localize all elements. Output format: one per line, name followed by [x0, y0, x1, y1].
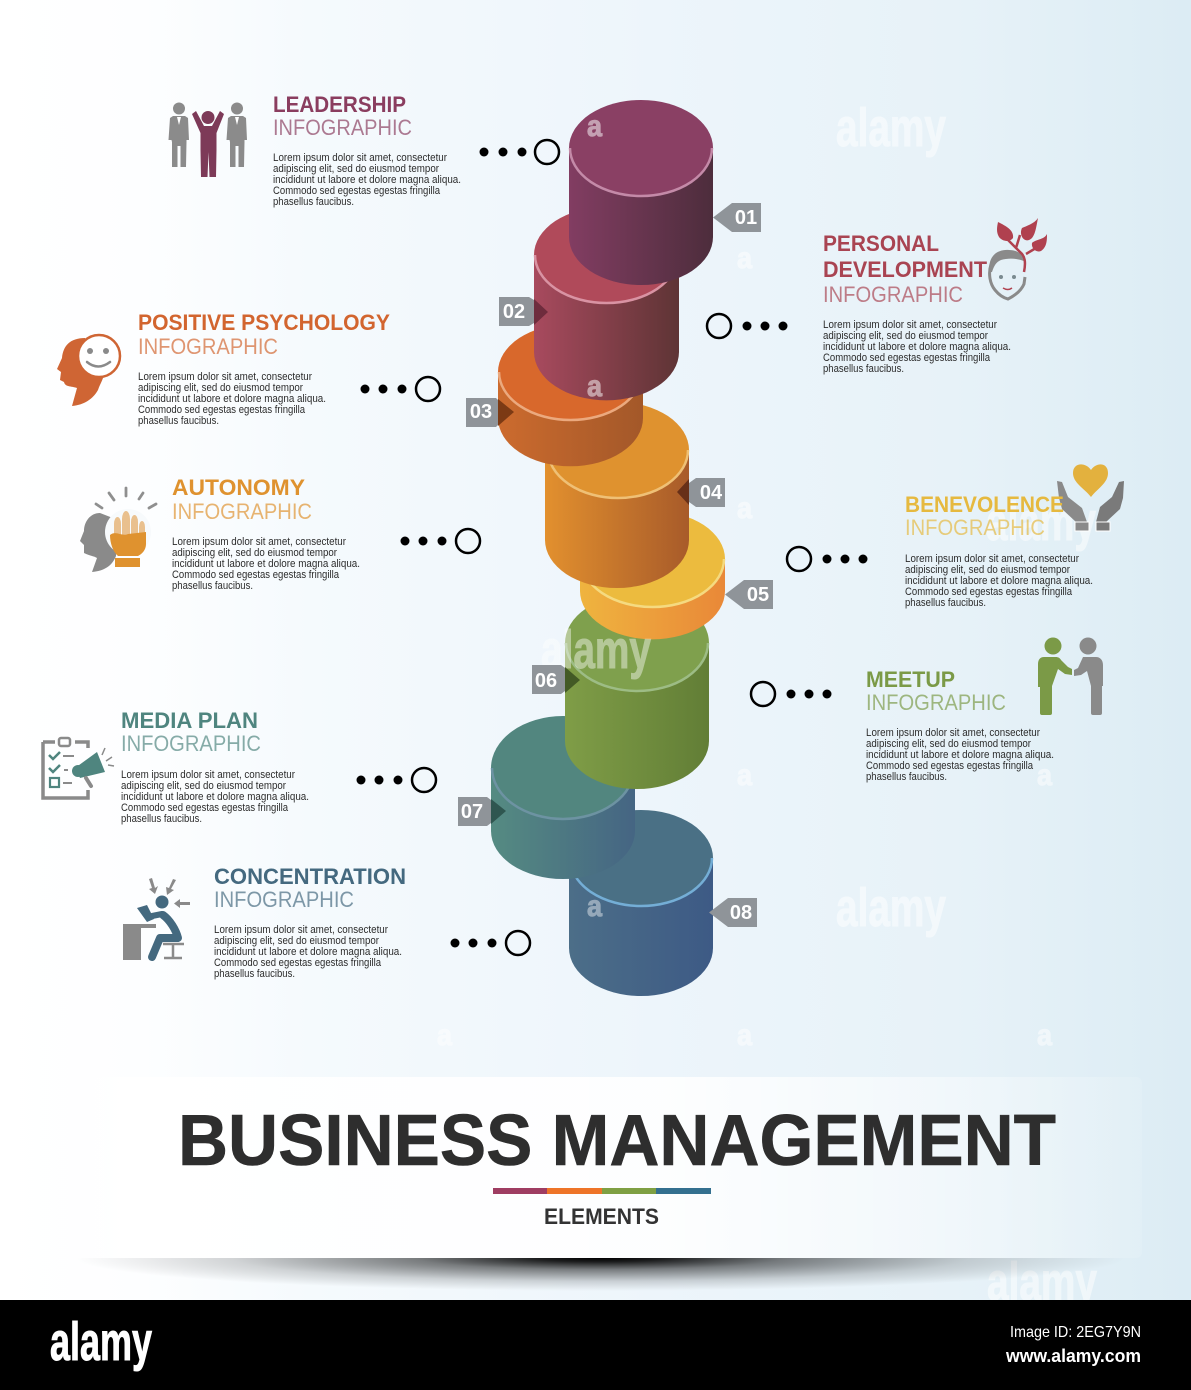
watermark: background: alamy: [836, 98, 946, 158]
subheading: INFOGRAPHIC: [866, 690, 1006, 715]
number tag 05: [725, 580, 773, 609]
icon: face with growing plant: [989, 218, 1047, 299]
icon: two people shaking hands: [1038, 638, 1103, 715]
body text: Commodo sed egestas egestas fringilla: [172, 569, 339, 581]
number tag 06: [532, 665, 580, 694]
watermark: background: a: [737, 242, 752, 275]
body text: phasellus faucibus.: [866, 771, 947, 783]
body text: adipiscing elit, sed do eiusmod tempor: [138, 382, 303, 394]
panel: personal development: [823, 218, 1047, 375]
heading: POSITIVE PSYCHOLOGY: [138, 310, 390, 335]
icon: checklist and megaphone: [43, 738, 114, 798]
body text: phasellus faucibus.: [214, 968, 295, 980]
number tag 07: [458, 797, 506, 826]
body text: phasellus faucibus.: [905, 597, 986, 609]
subheading: INFOGRAPHIC: [138, 334, 278, 359]
subheading: INFOGRAPHIC: [273, 115, 412, 140]
connector 07: [356, 768, 436, 792]
body text: [121, 769, 309, 825]
connector 01: [480, 140, 559, 164]
heading: LEADERSHIP: [273, 92, 406, 117]
heading: BENEVOLENCE: [905, 492, 1064, 517]
panel: media plan: [43, 708, 309, 825]
image id: Image ID: 2EG7Y9N: [1010, 1324, 1141, 1341]
body text: adipiscing elit, sed do eiusmod tempor: [121, 780, 286, 792]
body text: adipiscing elit, sed do eiusmod tempor: [273, 163, 439, 175]
body text: Commodo sed egestas egestas fringilla: [866, 760, 1033, 772]
watermark: over cylinders: alamy: [541, 620, 651, 680]
footer strip: [0, 1300, 1191, 1390]
watermark: over cylinders: a: [587, 890, 602, 923]
panel: autonomy: [80, 475, 360, 592]
body text: [172, 536, 360, 592]
number tag 04: 04: [700, 482, 723, 504]
connector 05: [787, 547, 868, 571]
subheading: INFOGRAPHIC: [172, 499, 312, 524]
banner background: [60, 1077, 1142, 1258]
body text: Lorem ipsum dolor sit amet, consectetur: [273, 152, 447, 164]
body text: phasellus faucibus.: [823, 363, 904, 375]
watermark: background: a: [1037, 1019, 1052, 1052]
body text: [823, 319, 1011, 375]
body text: [138, 371, 326, 427]
body text: Commodo sed egestas egestas fringilla: [905, 586, 1072, 598]
icon: head with smiley: [57, 335, 120, 406]
number tag 03: [466, 398, 514, 427]
panel: meetup: [866, 638, 1103, 783]
subheading: INFOGRAPHIC: [214, 887, 354, 912]
body text: adipiscing elit, sed do eiusmod tempor: [823, 330, 988, 342]
heading: PERSONAL: [823, 231, 939, 256]
body text: incididunt ut labore et dolore magna aliqua.: [866, 749, 1054, 761]
body text: [273, 152, 461, 208]
number tag 07: 07: [461, 801, 483, 823]
body text: Commodo sed egestas egestas fringilla: [138, 404, 305, 416]
body text: incididunt ut labore et dolore magna aliqua.: [121, 791, 309, 803]
number tag 01: 01: [735, 207, 757, 229]
body text: [905, 553, 1093, 609]
connector 08: [450, 931, 530, 955]
heading: MEETUP: [866, 667, 955, 692]
icon: three business people: [168, 102, 247, 177]
body text: adipiscing elit, sed do eiusmod tempor: [172, 547, 337, 559]
panel: positive psychology: [57, 310, 390, 427]
cylinder stack: [491, 100, 725, 996]
body text: incididunt ut labore et dolore magna aliqua.: [905, 575, 1093, 587]
cylinder 06: [565, 594, 709, 789]
watermark: background: [437, 98, 1097, 1312]
body text: Lorem ipsum dolor sit amet, consectetur: [121, 769, 295, 781]
panel: benevolence: [905, 464, 1124, 609]
cylinder 03: [498, 324, 643, 466]
watermark: over cylinders: a: [587, 110, 602, 143]
cylinder 04: [545, 402, 689, 588]
number tag 01: [713, 203, 761, 232]
watermark: background: a: [1037, 759, 1052, 792]
number tag 08: 08: [730, 902, 752, 924]
number tag 08: [709, 898, 757, 927]
connector 02: [707, 314, 788, 338]
body text: [214, 924, 402, 980]
subheading: INFOGRAPHIC: [121, 731, 261, 756]
number tag 02: [499, 297, 548, 326]
footer logo: alamy: [50, 1312, 152, 1372]
body text: Lorem ipsum dolor sit amet, consectetur: [138, 371, 312, 383]
watermark over benevolence: alamy: [986, 492, 1096, 552]
number tag 02: 02: [503, 301, 525, 323]
heading: DEVELOPMENT: [823, 257, 988, 282]
body text: incididunt ut labore et dolore magna aliqua.: [273, 174, 461, 186]
banner shadow: [75, 1258, 1125, 1291]
panel: leadership: [168, 92, 461, 208]
icon: head with raised fist: [80, 488, 156, 572]
body text: Lorem ipsum dolor sit amet, consectetur: [172, 536, 346, 548]
body text: adipiscing elit, sed do eiusmod tempor: [905, 564, 1070, 576]
watermark: over cylinders: [541, 110, 651, 923]
body text: incididunt ut labore et dolore magna aliqua.: [214, 946, 402, 958]
body text: Lorem ipsum dolor sit amet, consectetur: [866, 727, 1040, 739]
body text: phasellus faucibus.: [172, 580, 253, 592]
body text: phasellus faucibus.: [121, 813, 202, 825]
number tag 04: [677, 478, 725, 507]
watermark: background: a: [737, 492, 752, 525]
icon: person working at desk: [123, 878, 190, 960]
body text: Lorem ipsum dolor sit amet, consectetur: [823, 319, 997, 331]
body text: adipiscing elit, sed do eiusmod tempor: [214, 935, 379, 947]
cylinder 02: [534, 207, 679, 400]
body text: adipiscing elit, sed do eiusmod tempor: [866, 738, 1031, 750]
connector 06: [751, 682, 832, 706]
watermark: over cylinders: a: [587, 370, 602, 403]
body text: Lorem ipsum dolor sit amet, consectetur: [905, 553, 1079, 565]
watermark: background: a: [737, 1019, 752, 1052]
body text: incididunt ut labore et dolore magna aliqua.: [138, 393, 326, 405]
subheading: INFOGRAPHIC: [823, 282, 963, 307]
watermark: background: alamy: [836, 878, 946, 938]
cylinder 01: [569, 100, 713, 285]
icon: hands holding heart: [1057, 464, 1124, 531]
body text: phasellus faucibus.: [138, 415, 219, 427]
cylinder 05: [580, 511, 725, 639]
number tag 06: 06: [535, 670, 557, 692]
title: BUSINESS MANAGEMENT: [178, 1101, 1056, 1181]
body text: Commodo sed egestas egestas fringilla: [121, 802, 288, 814]
subtitle: ELEMENTS: [544, 1204, 659, 1229]
cylinder 07: [491, 716, 635, 879]
heading: CONCENTRATION: [214, 864, 406, 889]
watermark: background: alamy: [987, 1252, 1097, 1312]
number tag 05: 05: [747, 584, 769, 606]
body text: incididunt ut labore et dolore magna aliqua.: [823, 341, 1011, 353]
body text: Commodo sed egestas egestas fringilla: [823, 352, 990, 364]
connector 03: [360, 377, 440, 401]
body text: [866, 727, 1054, 783]
heading: MEDIA PLAN: [121, 708, 258, 733]
panel: title banner: [60, 1077, 1142, 1291]
number tag 03: 03: [470, 401, 492, 423]
cylinder 08: [569, 810, 713, 996]
heading: [823, 231, 988, 282]
watermark: background: a: [737, 759, 752, 792]
watermark: background: a: [437, 1019, 452, 1052]
body text: incididunt ut labore et dolore magna aliqua.: [172, 558, 360, 570]
body text: Lorem ipsum dolor sit amet, consectetur: [214, 924, 388, 936]
heading: AUTONOMY: [172, 475, 305, 500]
body text: Commodo sed egestas egestas fringilla: [273, 185, 440, 197]
subheading: INFOGRAPHIC: [905, 515, 1045, 540]
body text: phasellus faucibus.: [273, 196, 354, 208]
colour bar: [493, 1188, 711, 1194]
panel: concentration: [123, 864, 406, 980]
body text: Commodo sed egestas egestas fringilla: [214, 957, 381, 969]
connector 04: [400, 529, 480, 553]
website: www.alamy.com: [1005, 1346, 1141, 1366]
